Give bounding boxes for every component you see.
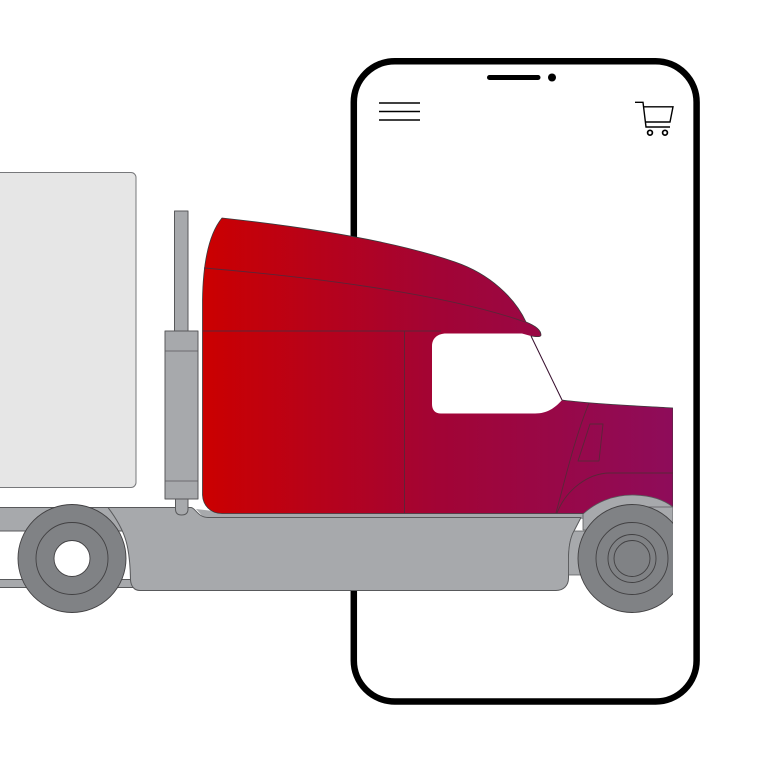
exhaust pipe <box>174 211 188 331</box>
truck <box>0 172 686 612</box>
trailer box <box>0 172 136 488</box>
cab panel lines <box>203 268 673 513</box>
icon: shopping cart <box>635 102 673 135</box>
cab window <box>432 334 562 414</box>
front wheel <box>578 504 673 613</box>
rear wheel <box>18 504 126 612</box>
chassis side skirt <box>108 508 581 590</box>
exhaust lower stub <box>176 497 188 515</box>
cab body <box>202 218 673 514</box>
frame piece behind front wheel <box>568 530 586 576</box>
icon: hamburger menu <box>379 103 420 120</box>
trailer frame beams <box>0 508 139 588</box>
phone speaker <box>490 75 538 80</box>
grey band under cab <box>196 509 586 519</box>
front fender <box>583 495 673 530</box>
illustration: truck emerging from phone <box>0 58 700 705</box>
windshield pillar line <box>531 336 562 400</box>
fender lower line <box>648 506 673 508</box>
phone frame <box>354 61 697 701</box>
exhaust muffler <box>165 331 198 499</box>
phone camera <box>548 74 556 82</box>
